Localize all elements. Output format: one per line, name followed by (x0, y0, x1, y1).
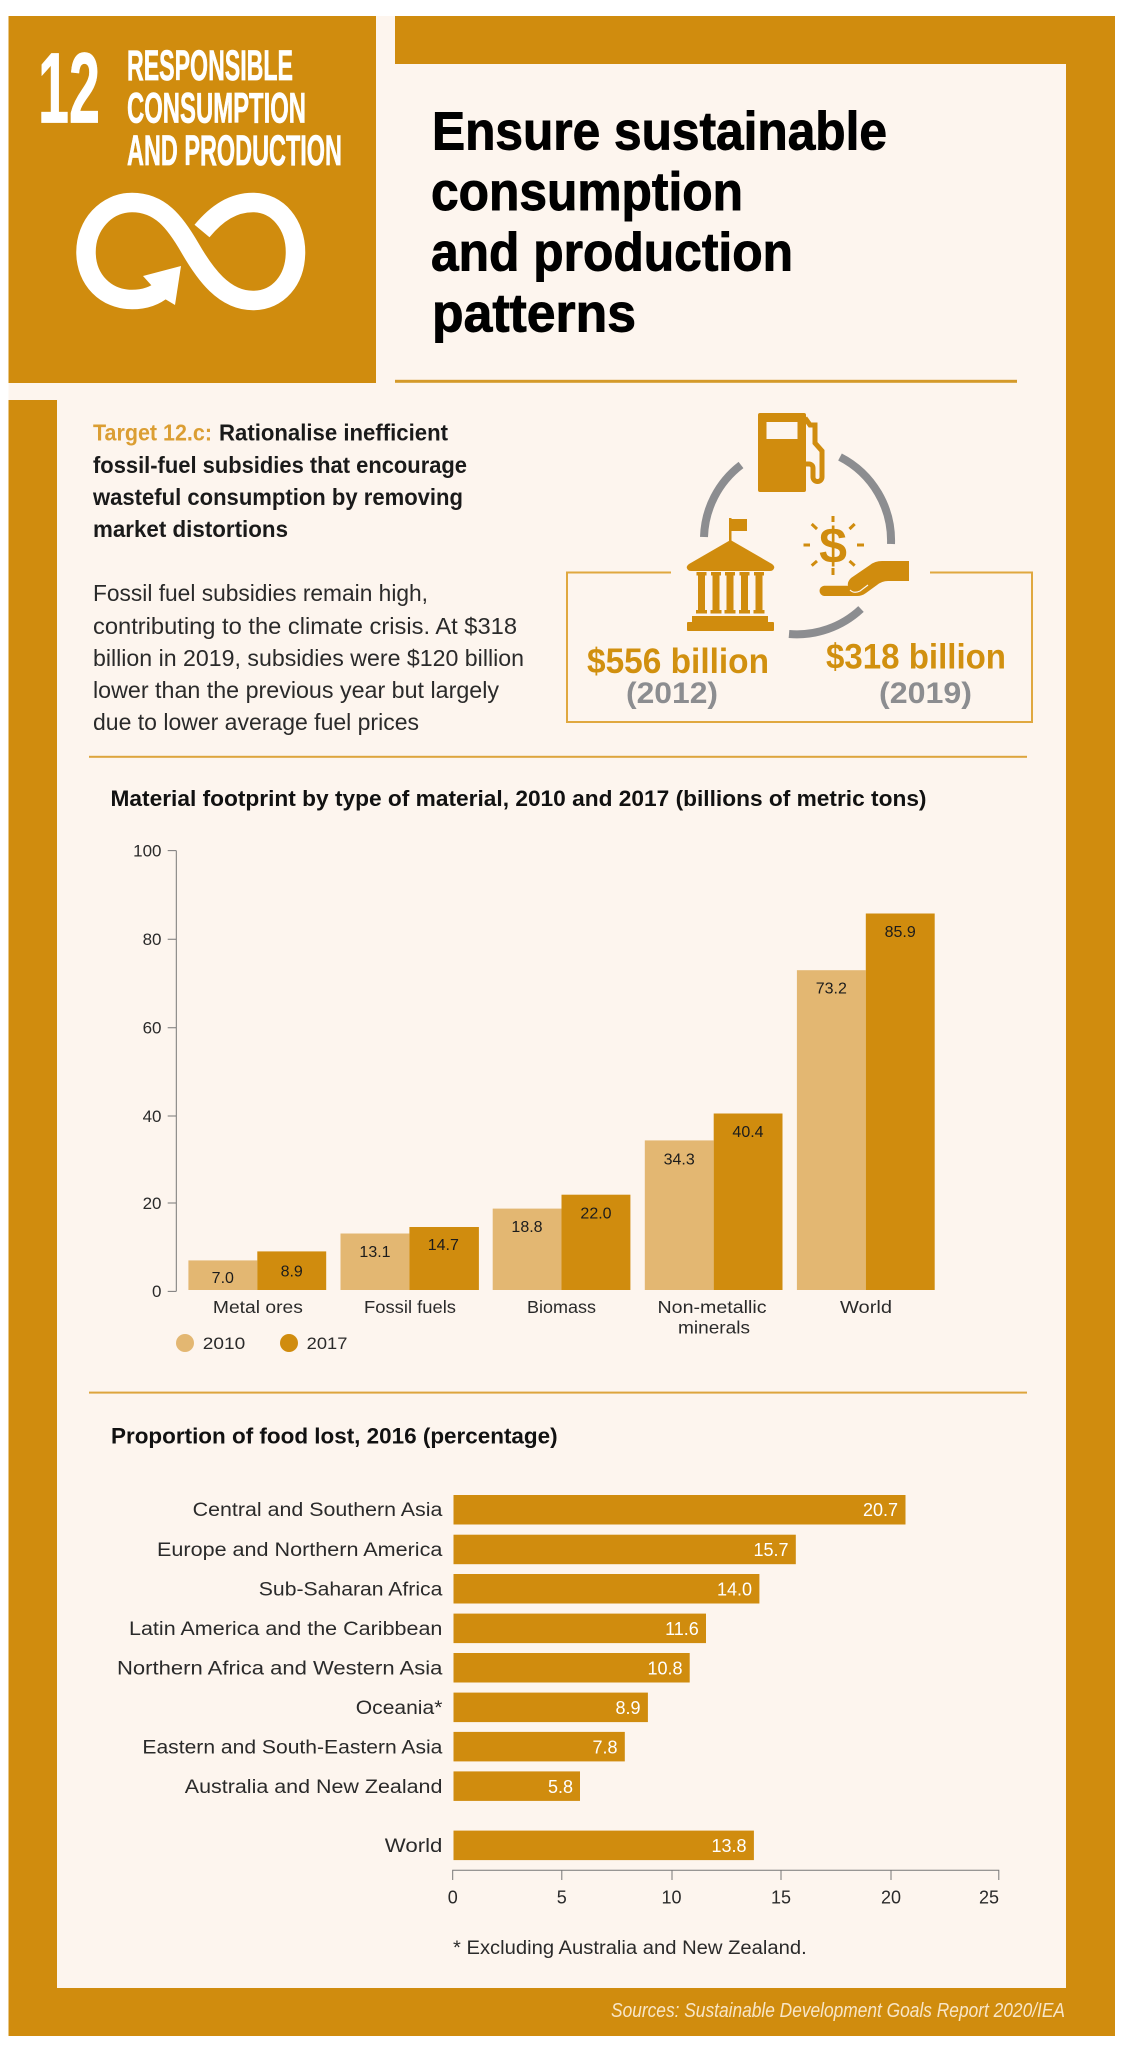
x axis (448, 1870, 999, 1907)
goal name (127, 42, 342, 175)
y axis: 40 (143, 1107, 162, 1126)
row: Latin America and the Caribbean: 11.6 (665, 1619, 699, 1639)
panel: food loss chart (111, 1423, 999, 1959)
row: Eastern and South-Eastern Asia: 7.8 (592, 1738, 618, 1758)
target heading: market distortions (93, 516, 288, 542)
row: Central and Southern Asia (193, 1495, 905, 1524)
goal name: CONSUMPTION (127, 84, 306, 132)
row: Sub-Saharan Africa: 14.0 (717, 1580, 752, 1600)
row: Australia and New Zealand (185, 1771, 580, 1801)
row: Eastern and South-Eastern Asia: Eastern and South-Eastern Asia (142, 1738, 443, 1758)
stat: 2012 subsidies: $556 billion (587, 642, 769, 681)
title: Ensure sustainable (432, 101, 887, 161)
legend: 2017 (307, 1334, 347, 1353)
icon: dollar on open hand: $ (819, 518, 847, 574)
bars: biomass: 22.0 (580, 1205, 612, 1222)
target heading (92, 420, 467, 542)
goal name: RESPONSIBLE (127, 42, 293, 90)
bars: non-metallic minerals: 40.4 (732, 1124, 764, 1141)
stat: 2012 subsidies: (2012) (626, 677, 718, 710)
y axis: 20 (143, 1194, 162, 1213)
bars: biomass: Biomass (527, 1297, 596, 1317)
x axis: 0 (448, 1887, 458, 1907)
title: and production (431, 223, 793, 283)
row: Latin America and the Caribbean (129, 1614, 706, 1643)
stat: 2012 subsidies (587, 642, 769, 710)
bars: non-metallic minerals: 34.3 (664, 1152, 695, 1168)
bars: fossil fuels: 13.1 (359, 1244, 391, 1261)
y axis (133, 842, 176, 1301)
row: World (385, 1831, 754, 1860)
panel: SDG 12 goal badge (8, 16, 376, 383)
x axis: 15 (771, 1887, 791, 1907)
bars: world: 73.2 (816, 980, 847, 998)
row: Europe and Northern America: 15.7 (753, 1540, 788, 1560)
bars: metal ores: 7.0 (212, 1270, 234, 1287)
body text: billion in 2019, subsidies were $120 billion (93, 645, 524, 671)
row: World: 13.8 (711, 1836, 746, 1856)
target heading: wasteful consumption by removing (92, 484, 463, 510)
row: Australia and New Zealand: 5.8 (548, 1777, 573, 1797)
bars: metal ores: 8.9 (281, 1263, 303, 1280)
heading: material footprint: Material footprint by type of material, 2010 and 2017 (billions of metric tons) (110, 786, 927, 811)
bars: world (797, 914, 935, 1317)
panel: subsidies callout (567, 413, 1032, 722)
row: Northern Africa and Western Asia: Northern Africa and Western Asia (117, 1658, 443, 1680)
target heading: Target 12.c: (93, 420, 212, 446)
target heading: Rationalise inefficient (219, 420, 448, 446)
bars: fossil fuels: 14.7 (428, 1237, 459, 1254)
y axis: 80 (143, 930, 162, 949)
bars: non-metallic minerals: minerals (678, 1318, 750, 1338)
bars: world: World (840, 1297, 892, 1317)
body text: contributing to the climate crisis. At $318 (93, 613, 517, 639)
x axis: 20 (881, 1887, 901, 1907)
row: Eastern and South-Eastern Asia (142, 1732, 625, 1761)
y axis: 100 (133, 842, 162, 860)
x axis: 25 (979, 1887, 999, 1907)
row: Oceania: Oceania* (356, 1698, 443, 1719)
stat: 2019 subsidies: $318 billion (826, 638, 1006, 677)
row: Europe and Northern America: Europe and Northern America (157, 1540, 443, 1561)
bars: fossil fuels: Fossil fuels (364, 1297, 456, 1317)
stat: 2019 subsidies (826, 638, 1006, 710)
row: Sub-Saharan Africa (259, 1574, 759, 1604)
goal number: 12 (38, 32, 100, 144)
row: Northern Africa and Western Asia (117, 1653, 690, 1682)
icon: infinity loop with arrow (86, 202, 296, 305)
goal name: AND PRODUCTION (127, 127, 342, 175)
legend: 2010 (203, 1334, 245, 1353)
y axis: 60 (143, 1018, 162, 1038)
row: Oceania (356, 1693, 648, 1722)
footnote: * Excluding Australia and New Zealand. (453, 1938, 807, 1959)
bars: metal ores (188, 1251, 326, 1317)
row: Australia and New Zealand: Australia and New Zealand (185, 1777, 442, 1798)
icon: fuel pump (758, 413, 822, 492)
row: Europe and Northern America (157, 1535, 796, 1564)
body text (93, 580, 524, 735)
icon: cycle arcs (704, 457, 891, 634)
x axis: 5 (557, 1887, 567, 1907)
bars: non-metallic minerals (645, 1114, 782, 1338)
row: Latin America and the Caribbean: Latin America and the Caribbean (129, 1619, 442, 1640)
x axis: 10 (661, 1887, 682, 1907)
legend (176, 1334, 347, 1353)
bars: biomass (493, 1195, 630, 1317)
icon: dollar on open hand (804, 516, 909, 596)
bars: biomass: 18.8 (511, 1219, 543, 1236)
row: Northern Africa and Western Asia: 10.8 (647, 1658, 682, 1678)
title: patterns (432, 284, 636, 344)
heading: food loss: Proportion of food lost, 2016 (percentage) (111, 1423, 558, 1448)
bars: fossil fuels (340, 1227, 479, 1317)
panel: material footprint chart (110, 786, 935, 1353)
y axis: 0 (152, 1282, 162, 1301)
row: Oceania: 8.9 (615, 1698, 640, 1718)
bars: metal ores: Metal ores (213, 1297, 303, 1317)
row: Central and Southern Asia: Central and Southern Asia (193, 1500, 443, 1521)
bars: world: 85.9 (885, 924, 916, 941)
row: Sub-Saharan Africa: Sub-Saharan Africa (259, 1580, 443, 1600)
row: Central and Southern Asia: 20.7 (863, 1500, 898, 1520)
body text: lower than the previous year but largely (93, 677, 499, 703)
icon: government building (687, 518, 774, 631)
row: World: World (385, 1836, 442, 1857)
body text: Fossil fuel subsidies remain high, (93, 580, 428, 606)
body text: due to lower average fuel prices (93, 709, 419, 735)
stat: 2019 subsidies: (2019) (879, 677, 972, 710)
title: consumption (431, 162, 743, 222)
bars: non-metallic minerals: Non-metallic (658, 1297, 767, 1317)
title (431, 101, 887, 344)
target heading: fossil-fuel subsidies that encourage (93, 452, 467, 478)
